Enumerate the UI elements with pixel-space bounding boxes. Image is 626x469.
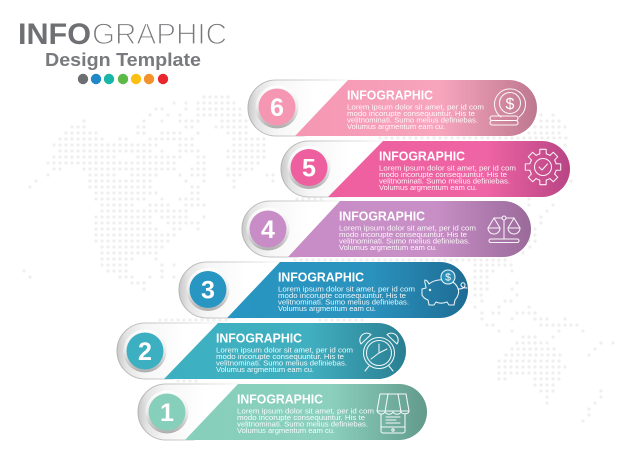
title word: GRAPHIC: GRAPHIC: [92, 18, 227, 51]
body text: Volumus argmentum eam cu.: [339, 243, 437, 252]
body text: Volumus argmentum eam cu.: [278, 304, 376, 313]
body text: Volumus argmentum eam cu.: [347, 122, 445, 131]
icon: mobile shop: [377, 394, 409, 433]
icon: alarm clock: [360, 333, 398, 371]
title word: INFO: INFO: [18, 18, 91, 51]
body text: velitnominati. Sumo melius definiebas.: [237, 420, 368, 428]
body text: Volumus argmentum eam cu.: [216, 365, 314, 374]
body text: velitnominati. Sumo melius definiebas.: [216, 358, 347, 368]
body text: modo incorupte consequuntur. His te: [379, 170, 507, 179]
icon: scales: [488, 216, 520, 242]
heading: INFOGRAPHIC: [278, 270, 365, 284]
number badge: 1: [160, 399, 174, 427]
number badge: [146, 390, 188, 434]
body text: modo incorupte consequuntur. His te: [278, 291, 406, 300]
number badge: [186, 268, 230, 311]
panel: step 5: [281, 141, 570, 197]
body text: modo incorupte consequuntur. His te: [237, 413, 365, 422]
grey tab: [138, 384, 250, 440]
colour band: [295, 80, 537, 136]
body text: Lorem ipsum dolor sit amet, per id com: [237, 406, 374, 416]
heading: INFOGRAPHIC: [237, 392, 324, 406]
body text: [278, 284, 415, 313]
icon: piggy bank: [422, 270, 467, 305]
icon: piggy bank: $: [445, 272, 451, 284]
heading: INFOGRAPHIC: [347, 88, 434, 102]
body text: Volumus argmentum eam cu.: [237, 426, 335, 435]
colour band: [288, 201, 531, 257]
body text: Lorem ipsum dolor sit amet, per id com: [379, 164, 516, 172]
icon: coins: [490, 89, 526, 125]
body text: velitnominati. Sumo melius definiebas.: [379, 176, 510, 186]
panel: step 6: [248, 80, 537, 136]
number badge: [246, 208, 290, 250]
body text: Lorem ipsum dolor sit amet, per id com: [339, 224, 476, 232]
grey tab: [242, 201, 354, 257]
body text: [347, 102, 484, 131]
number badge: 6: [270, 94, 284, 122]
body text: [216, 346, 353, 374]
heading: INFOGRAPHIC: [216, 330, 303, 346]
body text: velitnominati. Sumo melius definiebas.: [347, 116, 478, 124]
panel: step 3: [179, 262, 468, 318]
number badge: 3: [201, 276, 215, 304]
title: [18, 18, 227, 51]
body text: modo incorupte consequuntur. His te: [216, 352, 344, 361]
number badge: [256, 86, 298, 128]
heading: INFOGRAPHIC: [379, 148, 466, 164]
body text: [379, 164, 516, 192]
body text: modo incorupte consequuntur. His te: [347, 109, 475, 118]
panel: step 4: [242, 201, 531, 257]
heading: INFOGRAPHIC: [339, 208, 426, 224]
panel: step 1: [138, 384, 427, 440]
grey tab: [248, 80, 360, 136]
body text: velitnominati. Sumo melius definiebas.: [278, 298, 409, 306]
subtitle: Design Template: [45, 50, 201, 70]
colour band: [328, 141, 570, 197]
body text: [237, 406, 374, 435]
body text: velitnominati. Sumo melius definiebas.: [339, 236, 470, 246]
colour band: [227, 262, 468, 318]
body text: Volumus argmentum eam cu.: [379, 183, 477, 192]
grey tab: [179, 262, 291, 318]
number badge: [124, 330, 166, 372]
number badge: [288, 146, 330, 189]
body text: [339, 224, 476, 252]
grey tab: [281, 141, 393, 197]
body text: Lorem ipsum dolor sit amet, per id com: [347, 102, 484, 112]
number badge: 2: [138, 338, 152, 366]
colour band: [164, 323, 406, 379]
dotted world map: [24, 97, 613, 421]
colour dots: [78, 74, 168, 84]
body text: Lorem ipsum dolor sit amet, per id com: [216, 346, 353, 354]
colour band: [185, 384, 427, 440]
icon: coins: $: [506, 96, 515, 113]
grey tab: [117, 323, 229, 379]
number badge: 5: [302, 154, 316, 182]
panel: step 2: [117, 323, 406, 379]
number badge: 4: [261, 216, 275, 244]
icon: gear with check: [525, 149, 561, 185]
body text: modo incorupte consequuntur. His te: [339, 230, 467, 239]
body text: Lorem ipsum dolor sit amet, per id com: [278, 284, 415, 294]
